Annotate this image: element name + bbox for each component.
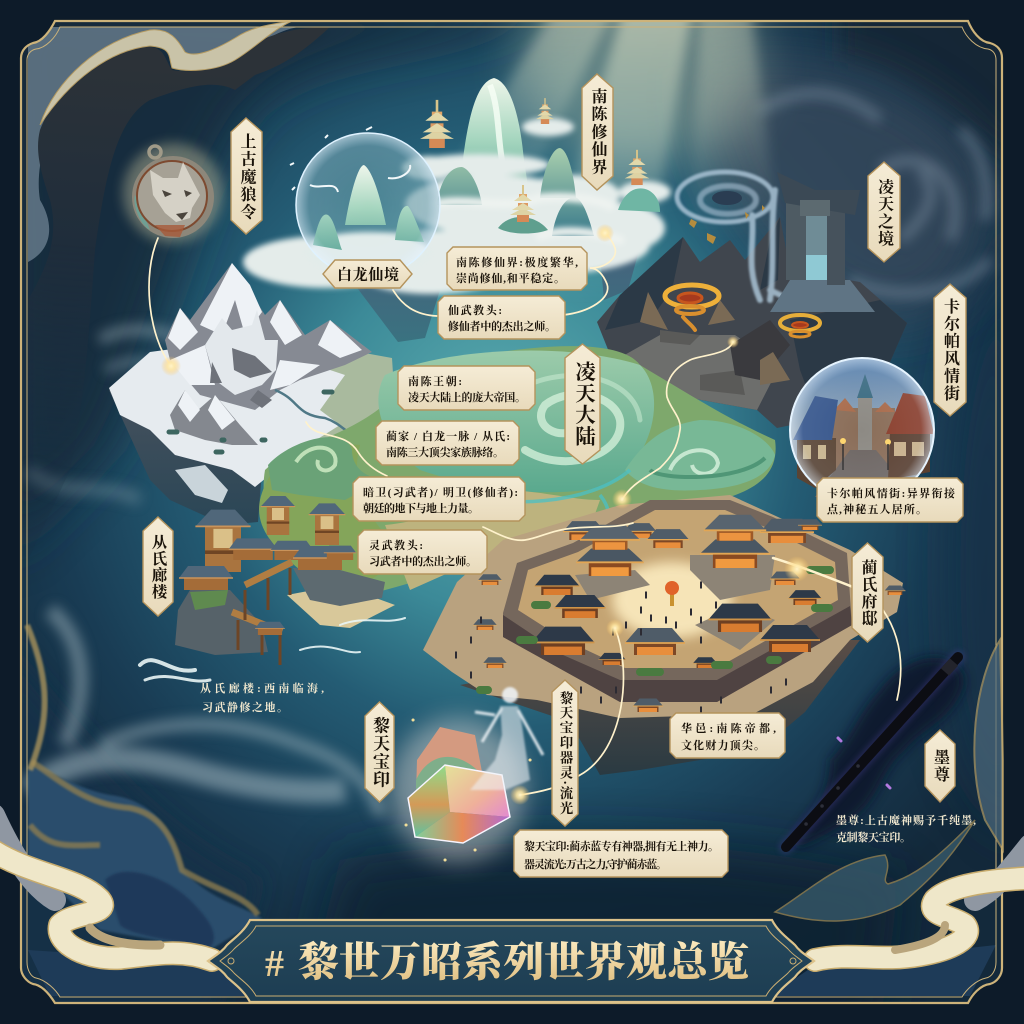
bubble: Bailong fairyland [290, 127, 440, 277]
caption: Karpa style street [817, 478, 963, 522]
caption: Huayi capital: 文化财力顶尖。 [681, 738, 765, 752]
caption: Mozun flute: 墨尊:上古魔神赐予千纯墨, [836, 813, 976, 827]
seal knob [416, 727, 482, 795]
caption: Nanchen immortal realm: 崇尚修仙,和平稳定。 [456, 271, 565, 285]
main continent: jade lands [259, 346, 776, 600]
big jade swirl [510, 376, 640, 461]
eastern cloud swirl [625, 420, 775, 490]
spirit figure [470, 687, 543, 790]
cream ribbon: bottom right [815, 845, 1024, 960]
city wall [503, 500, 852, 702]
tan fold [90, 928, 160, 945]
snowy river [275, 390, 365, 440]
caption: Karpa style street: 点,神秘五人居所。 [827, 502, 927, 516]
tag: Lin family mansion [852, 543, 883, 642]
gold outline [0, 850, 212, 960]
caption: three great families [376, 421, 519, 465]
Huayi city island [423, 495, 906, 775]
tag: Mozun [925, 730, 955, 802]
pagodas [420, 100, 454, 148]
floating island: Nanchen immortal realm [243, 78, 671, 342]
tag: Karpa style street: 卡尔帕风情街 [942, 297, 960, 402]
caption: spirit martial instructor: 灵武教头: [369, 538, 423, 552]
seal cube [408, 765, 450, 837]
icon: ancient wolf token [123, 143, 223, 243]
caption: Nanchen dynasty: 南陈王朝: [408, 374, 462, 388]
jade plateau [378, 351, 654, 492]
caption: shadow guards and bright guards [353, 477, 525, 521]
light rays from above [410, 0, 780, 300]
tag: Mozun: 墨尊 [932, 749, 950, 783]
grey coastal rocks [293, 568, 385, 606]
tag: Nanchen immortal realm [582, 74, 613, 190]
cream ribbon: right side wisp [974, 640, 1003, 850]
caption: shadow guards and bright guards: 朝廷的地下与地上力量。 [363, 501, 479, 515]
tag: seal spirit Liuguang: 黎天宝印器灵·流光 [558, 690, 573, 816]
grey stone plates [612, 335, 780, 410]
rock cliffs [109, 390, 262, 525]
tag: seal spirit Liuguang [552, 680, 578, 826]
tag: Nanchen immortal realm: 南陈修仙界 [589, 88, 607, 176]
tan fields [385, 490, 600, 590]
cream body [0, 850, 212, 960]
Congshi corridor tower and coast [140, 496, 405, 681]
title banner [208, 920, 814, 1002]
tag: Bailong fairyland: 白龙仙境 [337, 266, 399, 284]
bubble: Karpa style street [790, 358, 934, 502]
courtyard [518, 510, 838, 668]
teal peaks in cloud [437, 148, 594, 236]
caption: Nanchen dynasty [398, 366, 535, 410]
storm eye [712, 191, 742, 205]
corner paint: top left grey panel [28, 27, 300, 262]
rock underside [460, 640, 860, 775]
wolf head peak [205, 310, 278, 395]
caption: Nanchen immortal realm [447, 247, 587, 290]
sparkles [406, 720, 530, 860]
caption: Karpa style street: 卡尔帕风情街:异界衔接 [827, 486, 956, 500]
grey back fold [0, 815, 55, 900]
caption: Mozun flute: 克制黎天宝印。 [836, 830, 911, 844]
cloud wisps on peaks [430, 197, 620, 240]
white dragons and birds [290, 127, 410, 192]
continent body [264, 346, 776, 600]
caption: Nanchen dynasty: 凌天大陆上的庞大帝国。 [408, 390, 526, 404]
caption: Litian seal and spirit [514, 830, 728, 877]
island underside rocks [355, 240, 642, 342]
cream ribbon: bottom left [0, 815, 212, 960]
tag: Lingtian realm: 凌天之境 [876, 177, 894, 248]
corner paint: bottom left navy pool [105, 872, 214, 948]
smoke drifts on the lower left [28, 330, 380, 815]
distant buildings and clock tower [832, 408, 895, 470]
crowds [455, 585, 787, 710]
corner paint: top left dark swirl [28, 27, 330, 560]
grey back fold [975, 845, 1024, 900]
palace halls [563, 521, 605, 540]
snow peaks [165, 263, 372, 410]
tag: Lingtian realm [868, 162, 900, 262]
snow block [175, 465, 228, 503]
market stalls and outer town [478, 574, 502, 585]
caption: Nanchen immortal realm: 南陈修仙界:极度繁华, [456, 255, 578, 269]
blue roof house [797, 438, 836, 488]
caption: Huayi capital [670, 713, 785, 758]
corner paint: bottom right blue wave [775, 820, 975, 921]
pine trees [169, 392, 332, 452]
rock spikes by the vortex [640, 292, 790, 385]
icon: Litian treasure seal with spirit [390, 687, 543, 862]
western cloud swirl [268, 437, 385, 500]
stone palace platforms [575, 555, 775, 650]
gold ore fragments [689, 205, 765, 244]
street lamps [840, 438, 891, 470]
title text: # [265, 943, 284, 985]
cloud sea [243, 118, 671, 294]
ground [423, 495, 903, 718]
lower snow peaks [170, 390, 258, 445]
floating island: snow mountains [109, 263, 395, 525]
floating island: Lingtian realm [597, 172, 907, 428]
caption: shadow guards and bright guards: 暗卫(习武者)/ 明卫(修仙者): [363, 485, 518, 499]
wooden pavilions [261, 496, 295, 535]
caption: immortal martial instructor [438, 296, 565, 339]
grassy slope [260, 345, 395, 455]
dark rock body [597, 217, 907, 428]
tag: Lingtian continent [565, 344, 600, 464]
caption: Litian seal and spirit: 黎天宝印:蔺赤蓝专有神器,拥有无上神力。 [524, 839, 719, 853]
caption: Congshi corridor tower: 习武静修之地。 [202, 700, 288, 714]
corner paint: bottom left blue and gold wave [28, 765, 262, 950]
tag: Bailong fairyland [323, 260, 412, 288]
tag: Lin family mansion: 蔺氏府邸 [859, 558, 877, 627]
stone gate [770, 172, 875, 312]
tag: Congshi corridor tower: 从氏廊楼 [150, 534, 167, 600]
olive green hill [259, 444, 400, 587]
waves [140, 618, 405, 681]
title text: 黎世万昭系列世界观总览 [298, 939, 749, 985]
connector glow dots [161, 224, 810, 805]
caption: Mozun flute [836, 813, 976, 844]
gold outline [815, 878, 1024, 960]
corner paint: bottom navy strips [28, 945, 996, 996]
wolf head [150, 162, 200, 222]
fire vortices [665, 285, 820, 337]
caption: three great families: 蔺家 / 白龙一脉 / 从氏: [386, 429, 510, 443]
caption: spirit martial instructor: 习武者中的杰出之师。 [369, 554, 477, 568]
main mountain peak [462, 78, 530, 200]
turquoise river [455, 470, 630, 545]
tag: ancient wolf token [231, 118, 262, 234]
connector lines [149, 233, 901, 795]
snow plateau [109, 340, 345, 487]
caption: spirit martial instructor [358, 530, 487, 574]
red roof house [888, 432, 930, 480]
tag: Karpa style street [934, 284, 966, 416]
caption: Huayi capital: 华邑:南陈帝都, [681, 721, 776, 735]
icon: Mozun ink flute [786, 657, 965, 847]
gold lantern cauldron [665, 581, 679, 606]
corner paint: bottom left gold brush [30, 762, 258, 915]
caption: three great families: 南陈三大顶尖家族脉络。 [386, 445, 504, 459]
tag: Litian treasure seal [365, 702, 394, 802]
ornament rings [228, 958, 796, 964]
caption: Congshi corridor tower: 从氏廊楼:西南临海, [200, 681, 324, 695]
jade foothills [498, 217, 548, 234]
caption: Litian seal and spirit: 器灵流光:万古之力,守护蔺赤蓝。 [524, 857, 667, 871]
tag: Lingtian continent: 凌天大陆 [572, 361, 596, 447]
cobble street [815, 450, 915, 497]
bridges and pier [232, 562, 292, 632]
spiral storm [677, 172, 810, 302]
green trees [480, 570, 830, 690]
beach [287, 585, 395, 628]
caption: immortal martial instructor: 修仙者中的杰出之师。 [448, 319, 556, 333]
caption: Congshi corridor tower [200, 681, 324, 714]
tag: Congshi corridor tower [143, 517, 173, 616]
corner paint: top left cream ribbon [40, 21, 292, 125]
tag: Litian treasure seal: 黎天宝印 [370, 716, 390, 788]
tag: ancient wolf token: 上古魔狼令 [238, 133, 256, 221]
tan fold [895, 925, 945, 950]
cream body [815, 878, 1024, 960]
cliff rock [175, 590, 268, 655]
caption: immortal martial instructor: 仙武教头: [448, 303, 502, 317]
cream ribbon: left side wisp [27, 625, 45, 770]
